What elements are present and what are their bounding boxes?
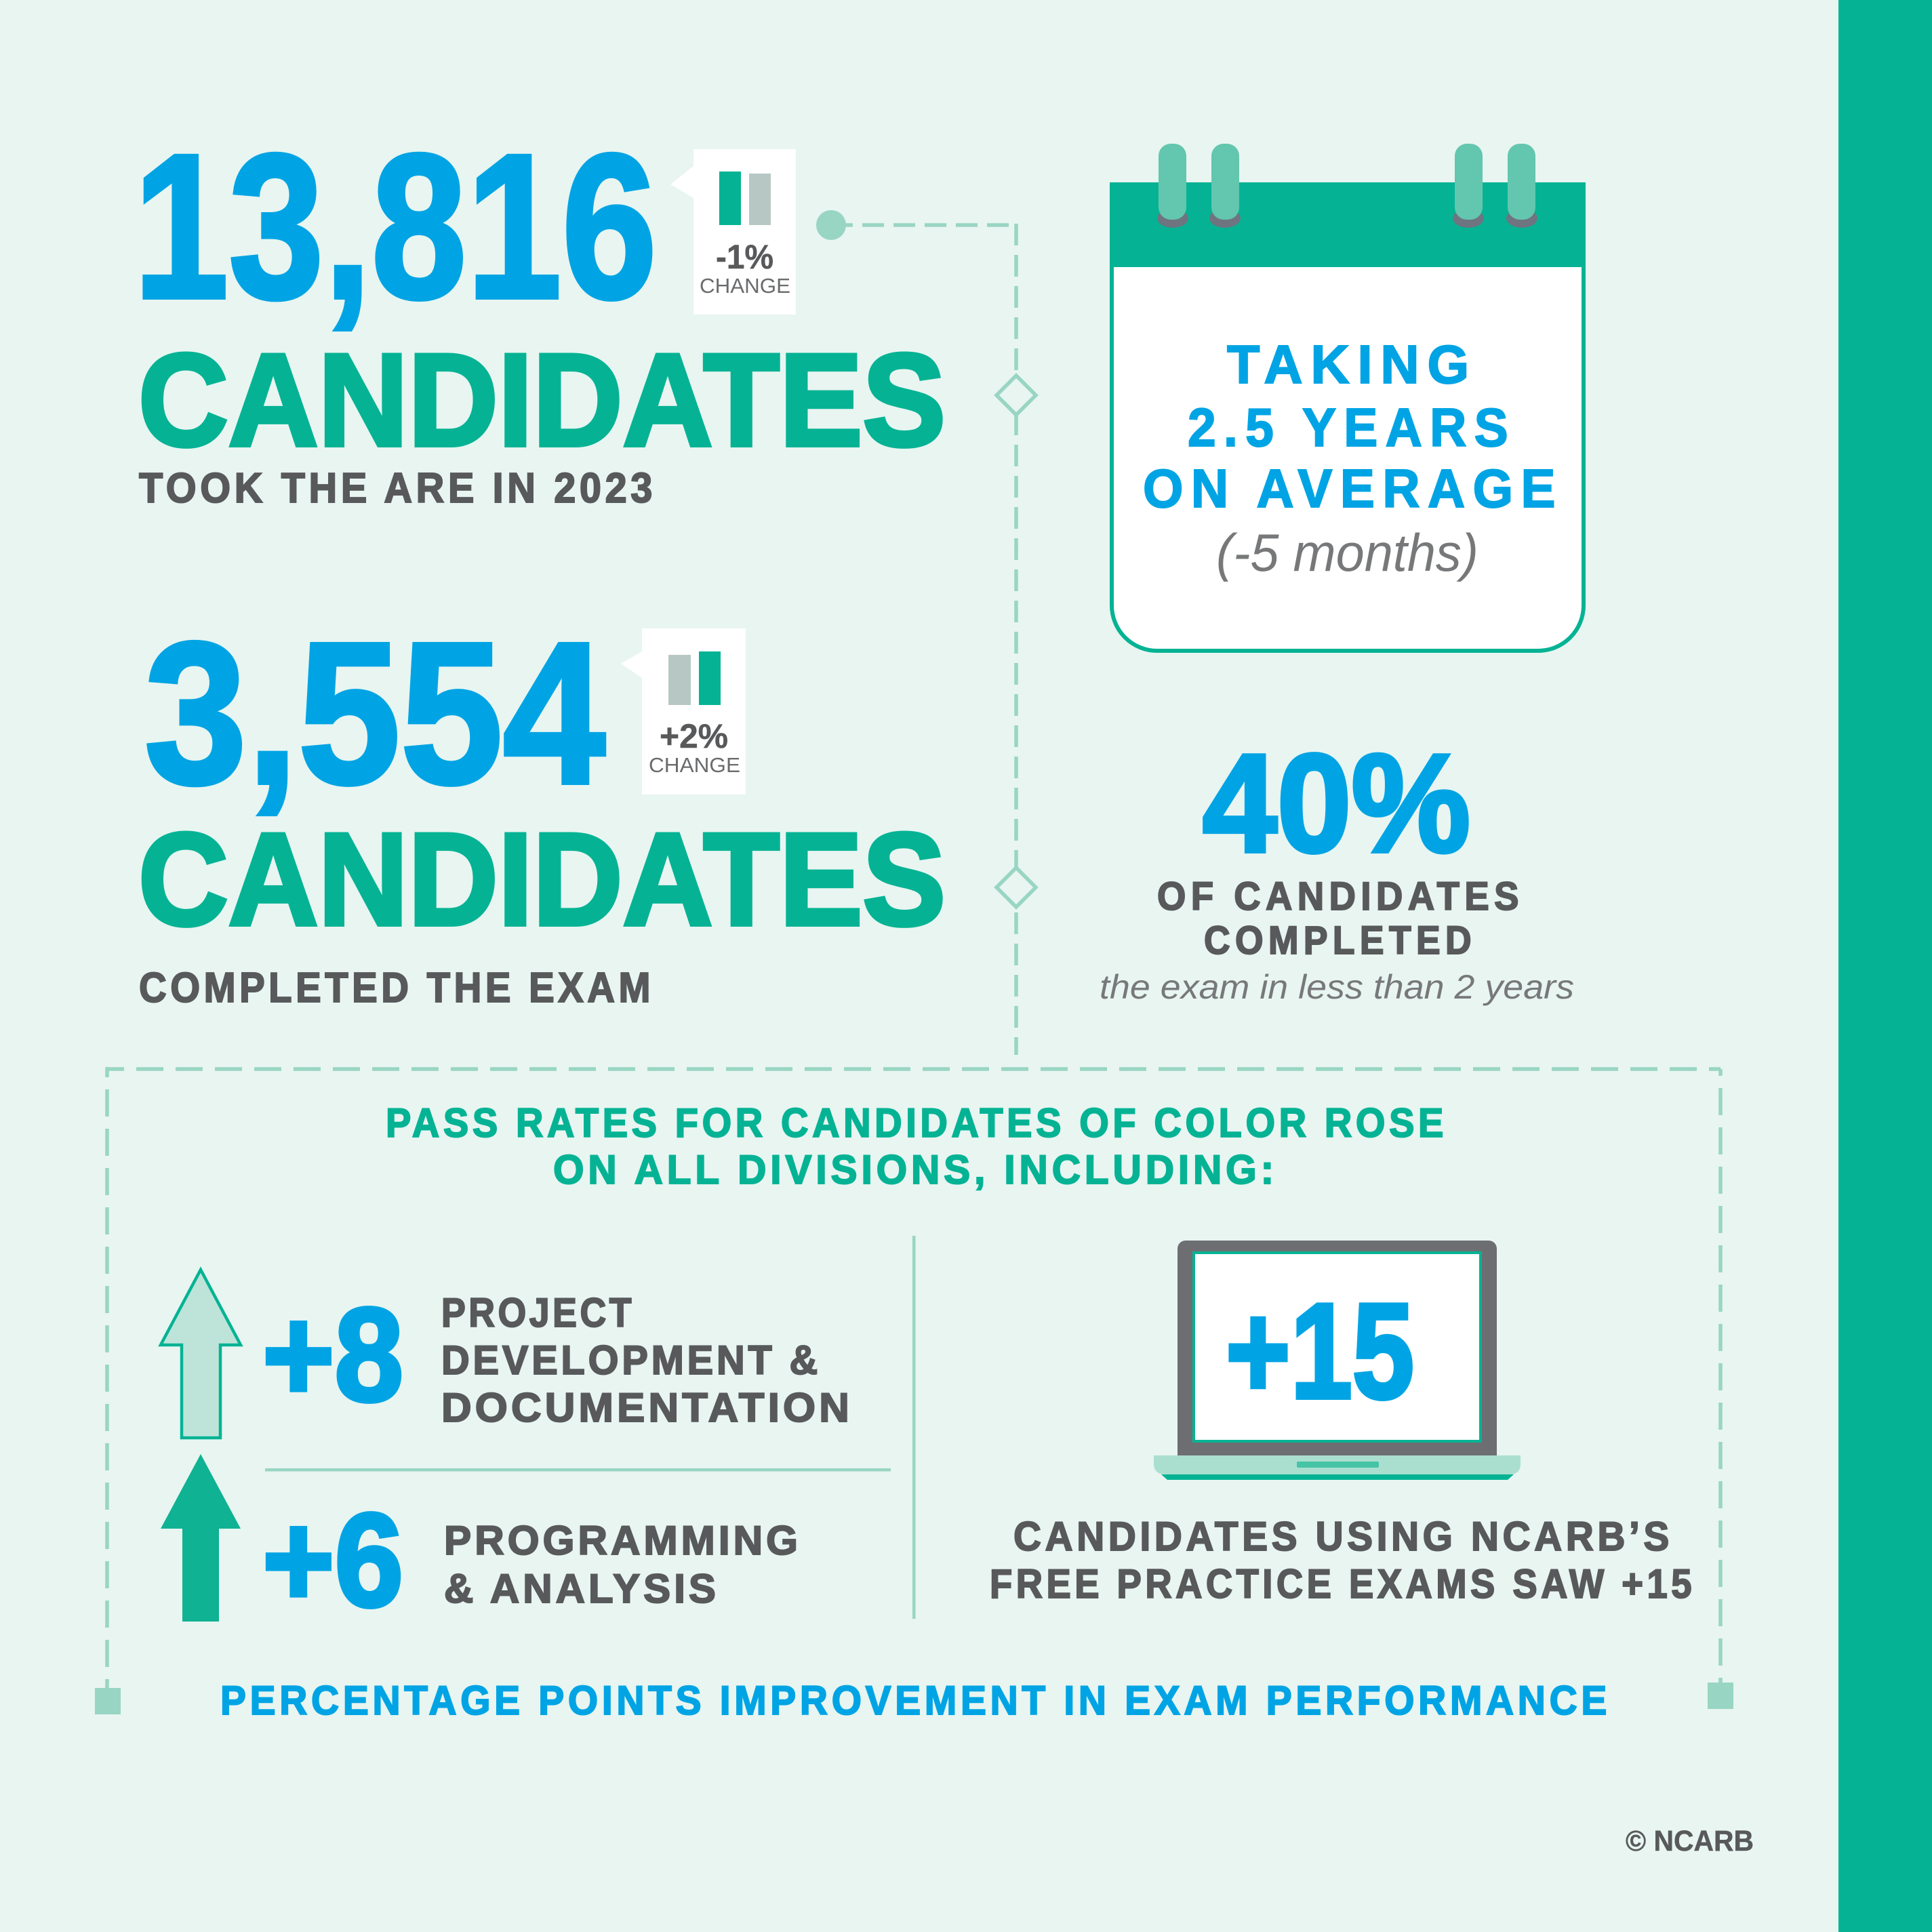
heading: pass rates [386,1100,1447,1192]
caption of candidates completed: OF CANDIDATES [1157,874,1524,919]
icon: laptop with +15 [1154,1241,1521,1480]
row divider [265,1468,891,1471]
calendar text: (-5 months) [1216,523,1478,582]
right accent band [1838,0,1932,1932]
heading: pass rates: PASS RATES FOR CANDIDATES OF COLOR ROSE [386,1100,1447,1146]
calendar rings [1157,144,1537,228]
change badge: +2%: +2% [660,717,728,755]
stat: 40% completed in less than 2 years [1100,725,1574,1006]
change badge: -1% [670,149,796,315]
number +6: +6 [262,1486,403,1634]
change badge: +2%: CHANGE [649,753,740,777]
label project development: DOCUMENTATION [441,1385,853,1430]
column divider [912,1236,915,1619]
connector: dashed line from change badge to exam section [816,210,1036,1055]
number 3,554: 3,554 [144,601,607,826]
caption took the ARE: TOOK THE ARE IN 2023 [139,465,656,512]
change badge: -1%: CHANGE [700,274,790,298]
panel: dashed frame for pass rates [95,1067,1733,1714]
number 40%: 40% [1203,725,1470,881]
panel: calendar [1110,144,1586,651]
row: +8 project development and documentation [161,1270,853,1438]
label programming: PROGRAMMING [444,1518,801,1563]
stat: 40% completed in less than 2 years: COMPLETED [1204,919,1476,963]
heading candidates second: CANDIDATES [138,806,946,953]
label project development [441,1290,853,1430]
italic caption: the exam in less than 2 years [1100,968,1574,1006]
number +8: +8 [262,1281,403,1429]
label project development: PROJECT [441,1290,635,1335]
caption completed the exam: COMPLETED THE EXAM [139,965,654,1011]
calendar text [1143,334,1563,582]
calendar text: TAKING [1227,334,1477,395]
change badge: +2% [621,628,746,794]
copyright: © NCARB [1626,1825,1754,1857]
calendar text: 2.5 YEARS [1188,397,1516,458]
row: +6 programming and analysis [161,1454,801,1634]
caption: practice exams: CANDIDATES USING NCARB’S [1013,1514,1673,1559]
caption: practice exams [990,1514,1695,1607]
label programming [444,1518,801,1611]
stat: 13,816 candidates took the ARE [134,112,946,512]
caption: practice exams: FREE PRACTICE EXAMS SAW +15 [990,1561,1695,1607]
calendar text: ON AVERAGE [1143,458,1563,519]
heading candidates: CANDIDATES [138,327,946,474]
number 13,816: 13,816 [134,112,657,342]
change badge: -1%: -1% [716,238,773,276]
label programming: & ANALYSIS [444,1566,719,1611]
number +15: +15 [1226,1276,1414,1427]
stat: 3,554 candidates completed [138,601,946,1011]
arrow: outlined up [161,1270,241,1438]
heading: pass rates: ON ALL DIVISIONS, INCLUDING: [553,1147,1278,1192]
footer line: percentage points: PERCENTAGE POINTS IMPROVEMENT IN EXAM PERFORMANCE [220,1678,1611,1723]
arrow: solid up [161,1454,241,1622]
label project development: DEVELOPMENT & [441,1337,821,1383]
